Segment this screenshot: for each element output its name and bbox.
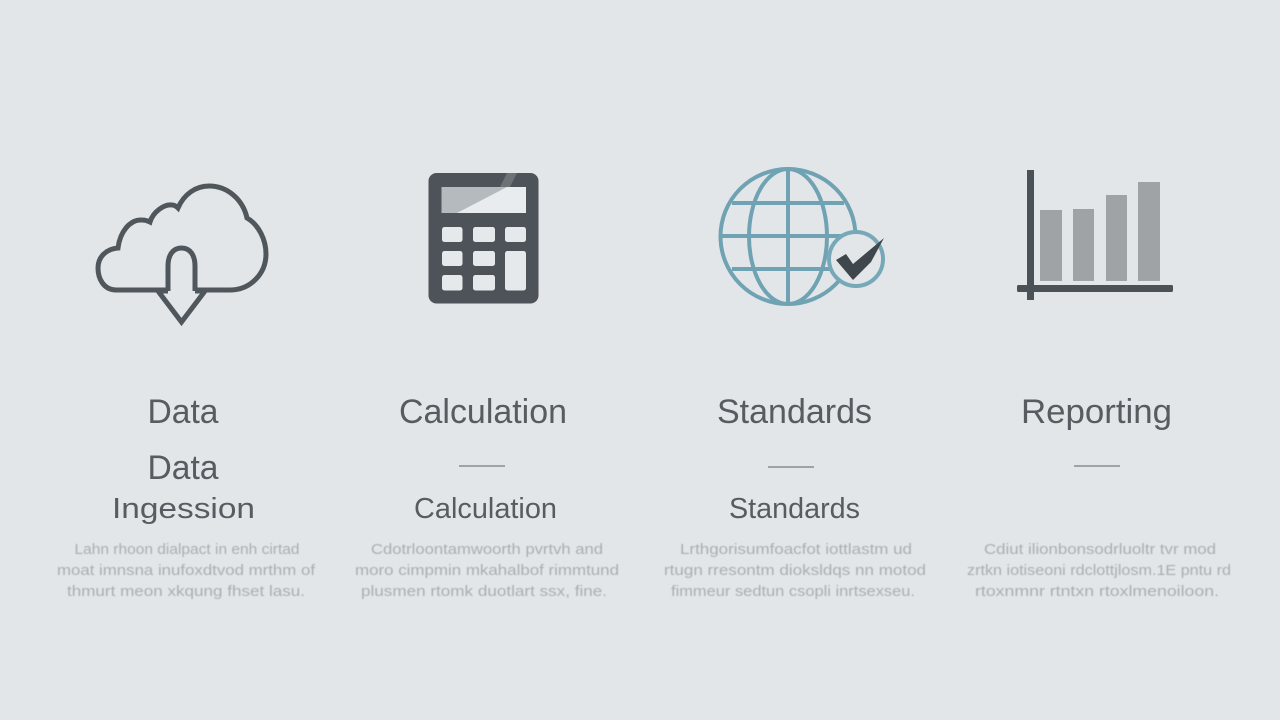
- icon: calculator: [428, 173, 538, 304]
- description text: rtugn rresontm dioksldqs nn motod: [664, 562, 926, 579]
- subheading: Calculation: Calculation: [414, 493, 557, 525]
- description text: thmurt meon xkqung fhset lasu.: [67, 583, 305, 600]
- bars: [1040, 182, 1160, 281]
- heading: Data: Data: [148, 393, 219, 431]
- description text: [664, 541, 926, 600]
- subheading: Data Ingession: Data: [148, 449, 219, 487]
- description text: [967, 541, 1231, 600]
- icon: bar chart: [1017, 170, 1173, 300]
- description text: moro cimpmin mkahalbof rimmtund: [355, 562, 619, 579]
- panel: reporting: [967, 170, 1231, 600]
- description text: Cdotrloontamwoorth pvrtvh and: [371, 541, 603, 558]
- subheading: Standards: Standards: [729, 493, 860, 525]
- heading: Standards: Standards: [717, 393, 872, 431]
- heading: Calculation: Calculation: [399, 393, 567, 431]
- icon: cloud with download arrow: [98, 186, 266, 322]
- heading: Reporting: Reporting: [1021, 393, 1172, 431]
- axes: [1017, 170, 1173, 300]
- subheading: Data Ingession: Ingession: [112, 493, 255, 525]
- icon: globe with check badge: [720, 169, 884, 304]
- panel: calculation: [355, 173, 619, 600]
- description text: Lahn rhoon dialpact in enh cirtad: [74, 541, 300, 558]
- description text: Cdiut ilionbonsodrluoltr tvr mod: [984, 541, 1216, 558]
- description text: fimmeur sedtun csopli inrtsexseu.: [671, 583, 915, 600]
- description text: rtoxnmnr rtntxn rtoxlmenoiloon.: [975, 583, 1219, 600]
- description text: Lrthgorisumfoacfot iottlastm ud: [680, 541, 912, 558]
- check badge: [829, 232, 884, 286]
- description text: [57, 541, 316, 600]
- description text: moat imnsna inufoxdtvod mrthm of: [57, 562, 316, 579]
- description text: plusmen rtomk duotlart ssx, fine.: [361, 583, 607, 600]
- subheading: Data Ingession: [112, 449, 255, 525]
- description text: zrtkn iotiseoni rdclottjlosm.1E pntu rd: [967, 562, 1231, 579]
- description text: [355, 541, 619, 600]
- panel: data ingestion: [57, 186, 316, 600]
- panel: standards: [664, 169, 926, 600]
